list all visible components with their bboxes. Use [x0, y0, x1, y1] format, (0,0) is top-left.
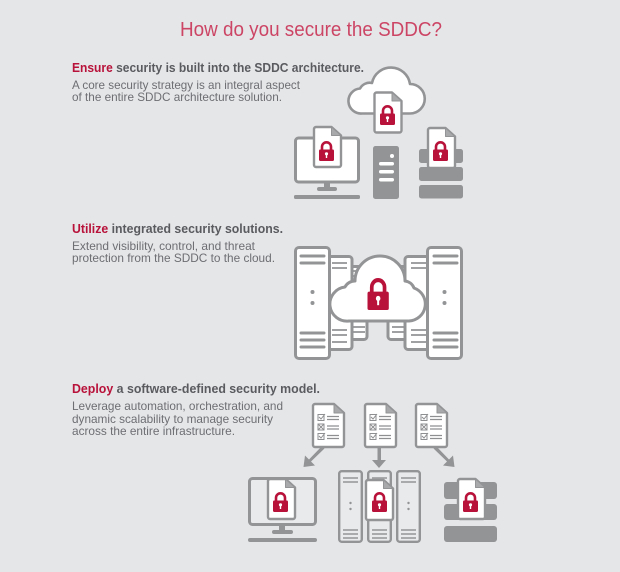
icon: cloud with lock: [330, 256, 425, 321]
icon: monitor with locked document: [248, 478, 317, 542]
icon: cloud with locked document: [348, 68, 425, 132]
section 1 text: of the entire SDDC architecture solution.: [72, 90, 282, 104]
icon: storage stack with locked document: [444, 479, 497, 542]
heading: deploy: Deploy a software-defined security model.: [72, 382, 320, 396]
section 2 illustration: servers with cloud lock: [296, 248, 462, 358]
heading: utilize: Utilize integrated security solutions.: [72, 222, 283, 236]
section 3 text: [72, 382, 320, 438]
heading: ensure: Ensure security is built into the SDDC architecture.: [72, 61, 364, 75]
body: deploy: Leverage automation, orchestration, and: [72, 399, 283, 413]
section 1 text: [72, 61, 364, 104]
icon: servers with locked document: [339, 471, 420, 542]
section 1 illustration: [294, 68, 463, 199]
arrows: [304, 446, 454, 468]
section 2 text: protection from the SDDC to the cloud.: [72, 251, 275, 265]
icon: checklist documents: [313, 404, 447, 447]
section 3 illustration: [248, 404, 497, 542]
icon: monitor with locked document: [294, 127, 360, 199]
section 2 text: [72, 222, 283, 265]
body: ensure: A core security strategy is an integral aspect: [72, 78, 301, 92]
body: utilize: Extend visibility, control, and threat: [72, 239, 256, 253]
section 3 text: dynamic scalability to manage security: [72, 412, 273, 426]
section 3 text: across the entire infrastructure.: [72, 424, 235, 438]
icon: storage stack with locked document: [419, 128, 463, 198]
title: How do you secure the SDDC?: [180, 18, 442, 41]
icon: tower server: [373, 146, 399, 199]
